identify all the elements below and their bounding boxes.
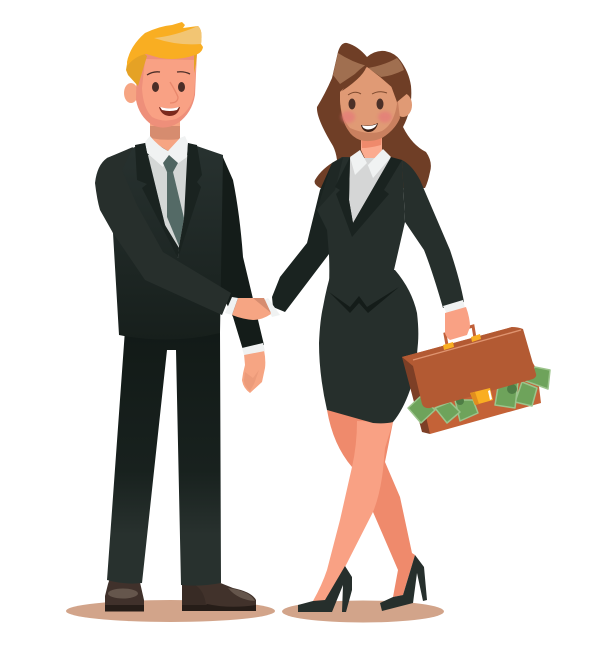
clasp: [470, 388, 493, 405]
woman face: [340, 64, 409, 141]
man neck: [150, 118, 180, 151]
man far hand: [242, 343, 265, 393]
money symbols: [456, 384, 517, 405]
woman eyebrows: [348, 92, 387, 95]
woman ear: [394, 93, 412, 117]
woman jacket: [317, 157, 405, 298]
woman left leg: [313, 421, 393, 601]
man shoes: [105, 578, 256, 612]
man tie: [163, 155, 184, 246]
man cuff: [225, 297, 238, 315]
man front arm sleeve: [95, 147, 231, 315]
woman shirt: [349, 158, 391, 223]
woman right arm: [402, 160, 464, 308]
woman left arm: [272, 163, 340, 312]
man jacket body: [100, 143, 223, 340]
woman left shoe: [298, 566, 352, 612]
man lapels: [135, 143, 202, 258]
woman blush: [341, 111, 392, 123]
woman skirt: [319, 270, 418, 423]
woman thumb behind: [253, 298, 271, 313]
man far arm: [220, 155, 264, 350]
handle: [443, 326, 481, 350]
woman lapels: [335, 157, 402, 237]
woman right leg: [327, 410, 415, 597]
man ear: [124, 83, 138, 103]
ground shadow: woman: [282, 600, 444, 622]
man hair: [126, 22, 203, 86]
man handshake hand: [232, 298, 271, 320]
briefcase with money: [402, 326, 550, 434]
woman hand cuff: [264, 298, 280, 317]
woman right shoe: [380, 555, 427, 611]
woman mouth: [361, 123, 378, 132]
woman hair strand: [342, 64, 367, 91]
man face: [136, 52, 197, 128]
man eyebrows: [147, 72, 190, 75]
case back: [402, 327, 541, 434]
man collar: [145, 136, 188, 167]
woman collar: [350, 149, 391, 178]
woman hand: [445, 307, 470, 340]
woman hair lock by ear: [390, 80, 409, 102]
handshake: [225, 297, 280, 320]
case side: [402, 357, 430, 434]
woman hair: [315, 43, 431, 188]
case flap: [402, 327, 536, 408]
woman jacket side shadow: [317, 158, 343, 210]
man trousers: [107, 330, 221, 586]
man nose: [170, 82, 178, 103]
man mouth: [159, 107, 180, 116]
man shirt: [148, 155, 188, 258]
man figure: [95, 22, 550, 612]
ground shadow: man: [66, 600, 275, 622]
woman neck: [361, 135, 382, 165]
man eyes: [152, 82, 185, 92]
banknotes: [408, 367, 550, 423]
woman figure: [272, 43, 464, 612]
flap highlight: [413, 330, 521, 360]
woman cuff: [443, 300, 465, 314]
woman waist pocket zigzag: [329, 287, 399, 313]
woman eyes: [348, 98, 384, 110]
